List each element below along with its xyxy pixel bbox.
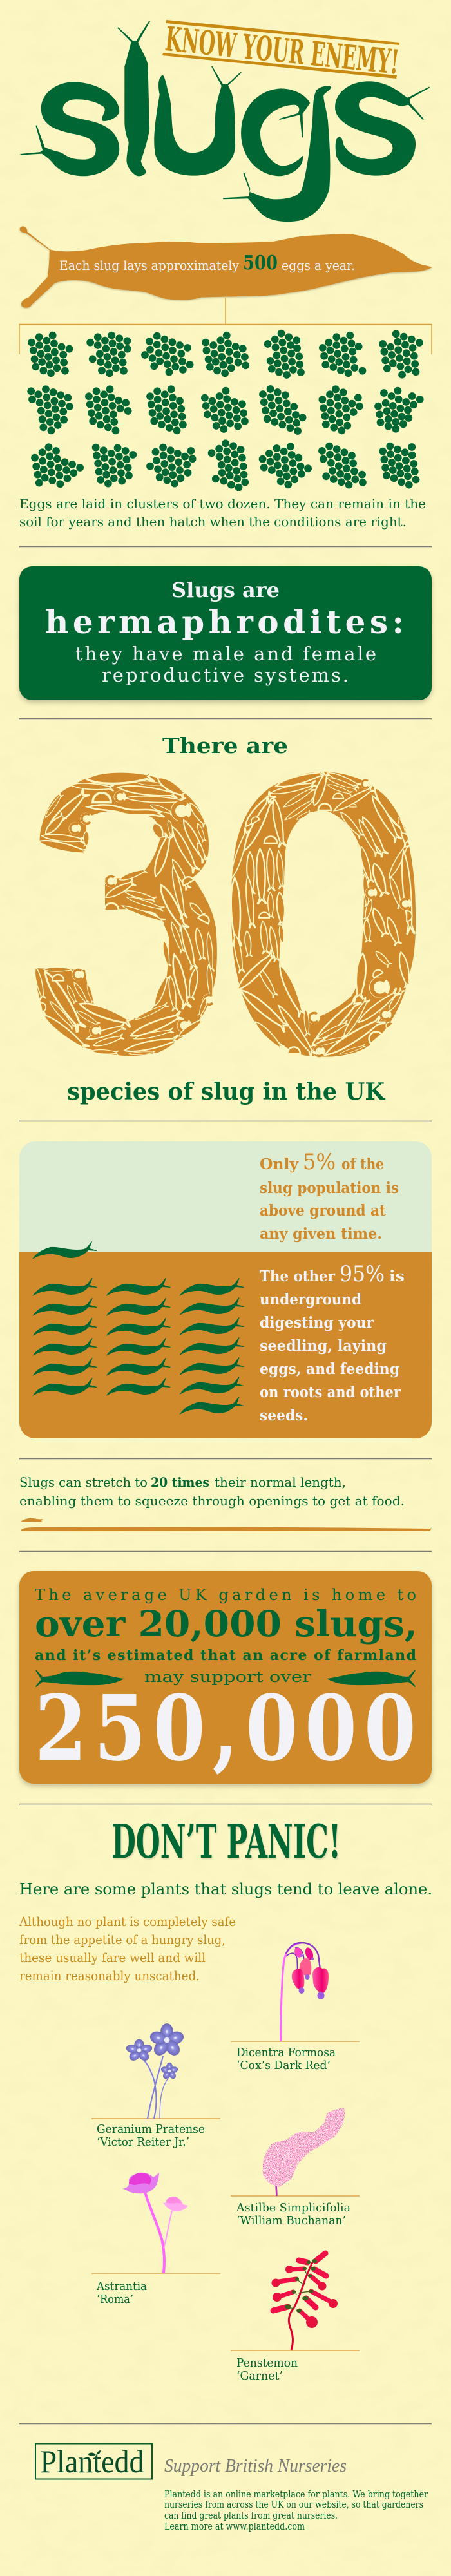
label	[236, 2356, 298, 2383]
label: Astrantia	[96, 2280, 147, 2293]
95 percent text: digesting your	[260, 1314, 374, 1331]
panel: 250,000 slugs: and it’s estimated that an acre of farmland	[35, 1647, 416, 1664]
5 percent text: of the	[341, 1156, 384, 1173]
about text	[164, 2488, 428, 2532]
label: Penstemon	[236, 2356, 298, 2370]
number 3 made of slugs	[33, 770, 217, 1056]
logo: plantedd: Plantedd	[40, 2443, 144, 2479]
5 percent text: 5%	[303, 1149, 336, 1175]
panel: hermaphrodites	[19, 566, 432, 700]
label: ‘Roma’	[97, 2293, 133, 2306]
95 percent text: seeds.	[260, 1407, 308, 1424]
number 0 made of slugs	[229, 769, 416, 1059]
slug text: 500	[243, 252, 278, 274]
heading: there are: There are	[162, 733, 288, 758]
orange note: from the appetite of a hungry slug,	[19, 1932, 225, 1947]
panel: 250,000 slugs	[19, 1571, 432, 1784]
egg caption: Eggs are laid in clusters of two dozen. They can remain in the	[19, 496, 426, 511]
5 percent text: Only	[260, 1156, 299, 1173]
hermaphrodites text	[45, 578, 404, 686]
5 percent text: slug population is	[260, 1179, 399, 1197]
label: ‘William Buchanan’	[236, 2214, 346, 2228]
icons: underground slug rows	[32, 1278, 244, 1415]
hermaphrodites text: hermaphrodites:	[45, 603, 404, 641]
letter s	[20, 82, 119, 176]
bracket from slug to eggs	[19, 298, 432, 354]
soil area	[19, 1252, 432, 1438]
banner: know your enemy	[162, 19, 401, 82]
95 percent text: seedling, laying	[260, 1337, 387, 1355]
letter u	[154, 66, 242, 176]
orange note: remain reasonably unscathed.	[19, 1968, 200, 1983]
egg caption	[19, 496, 426, 530]
hermaphrodites text: reproductive systems.	[102, 664, 349, 686]
stretch text: 20 times	[151, 1474, 209, 1490]
95 percent text: on roots and other	[260, 1384, 401, 1401]
label: ‘Victor Reiter Jr.’	[97, 2135, 189, 2149]
panel: 250,000 slugs: may support over	[144, 1669, 311, 1686]
orange note: Although no plant is completely safe	[19, 1914, 236, 1929]
egg caption: soil for years and then hatch when the conditions are right.	[19, 514, 407, 530]
tagline: support british nurseries: Support British Nurseries	[164, 2456, 347, 2476]
slug icon right	[327, 1670, 416, 1687]
95 percent text: eggs, and feeding	[260, 1360, 399, 1378]
panel: 250,000 slugs: The average UK garden is home to	[35, 1586, 416, 1604]
orange note: these usually fare well and will	[19, 1950, 206, 1965]
stretch text: Slugs can stretch to	[19, 1474, 148, 1490]
label: Geranium Pratense	[97, 2123, 205, 2136]
stretch text: enabling them to squeeze through openings to get at food.	[19, 1493, 405, 1509]
label	[236, 2201, 350, 2228]
icon: short and stretched slug	[21, 1518, 432, 1531]
stretch text	[19, 1474, 405, 1509]
panel: above and below ground	[19, 1141, 432, 1438]
heading: species of slug: species of slug in the UK	[67, 1078, 386, 1105]
panel: 250,000 slugs: over 20,000 slugs,	[35, 1603, 417, 1645]
label: ‘Garnet’	[236, 2369, 283, 2383]
subheading: Here are some plants that slugs tend to leave alone.	[19, 1880, 432, 1898]
label	[96, 2280, 147, 2306]
about text: can find great plants from great nurseries.	[164, 2510, 338, 2521]
5 percent text: any given time.	[260, 1225, 382, 1243]
orange slug with egg fact	[20, 226, 432, 308]
slug text	[59, 252, 355, 274]
plant: geranium	[91, 2023, 220, 2149]
plant: astilbe	[231, 2108, 360, 2228]
sky area	[19, 1141, 432, 1252]
5 percent text	[260, 1149, 399, 1243]
95 percent text: 95%	[340, 1261, 385, 1287]
label	[97, 2123, 205, 2149]
letter g	[241, 88, 310, 176]
95 percent text	[260, 1261, 405, 1424]
label: Astilbe Simplicifolia	[236, 2201, 350, 2215]
about text: Learn more at www.plantedd.com	[164, 2521, 305, 2532]
hermaphrodites text: they have male and female	[75, 643, 376, 665]
orange note	[19, 1914, 236, 1983]
panel: 250,000 slugs: 250,000	[35, 1675, 416, 1782]
slug text: Each slug lays approximately	[59, 258, 240, 273]
letter s right	[335, 81, 430, 176]
label: Dicentra Formosa	[236, 2046, 336, 2059]
egg clusters	[31, 334, 420, 488]
plant: penstemon	[231, 2253, 360, 2383]
stretch text: their normal length,	[215, 1474, 346, 1490]
label: ‘Cox’s Dark Red’	[236, 2059, 331, 2072]
slug icon left	[35, 1670, 124, 1687]
95 percent text: underground	[260, 1291, 361, 1308]
icon: single slug above ground	[32, 1241, 97, 1259]
title: slugs lettering	[20, 21, 430, 222]
hermaphrodites text: Slugs are	[171, 578, 280, 602]
5 percent text: above ground at	[260, 1202, 386, 1219]
label	[236, 2046, 336, 2072]
plant: astrantia	[91, 2173, 220, 2306]
letter l	[117, 21, 150, 176]
95 percent text: is	[389, 1268, 405, 1285]
plant: dicentra	[231, 1943, 360, 2072]
95 percent text: The other	[260, 1268, 336, 1285]
slug text: eggs a year.	[282, 258, 355, 273]
